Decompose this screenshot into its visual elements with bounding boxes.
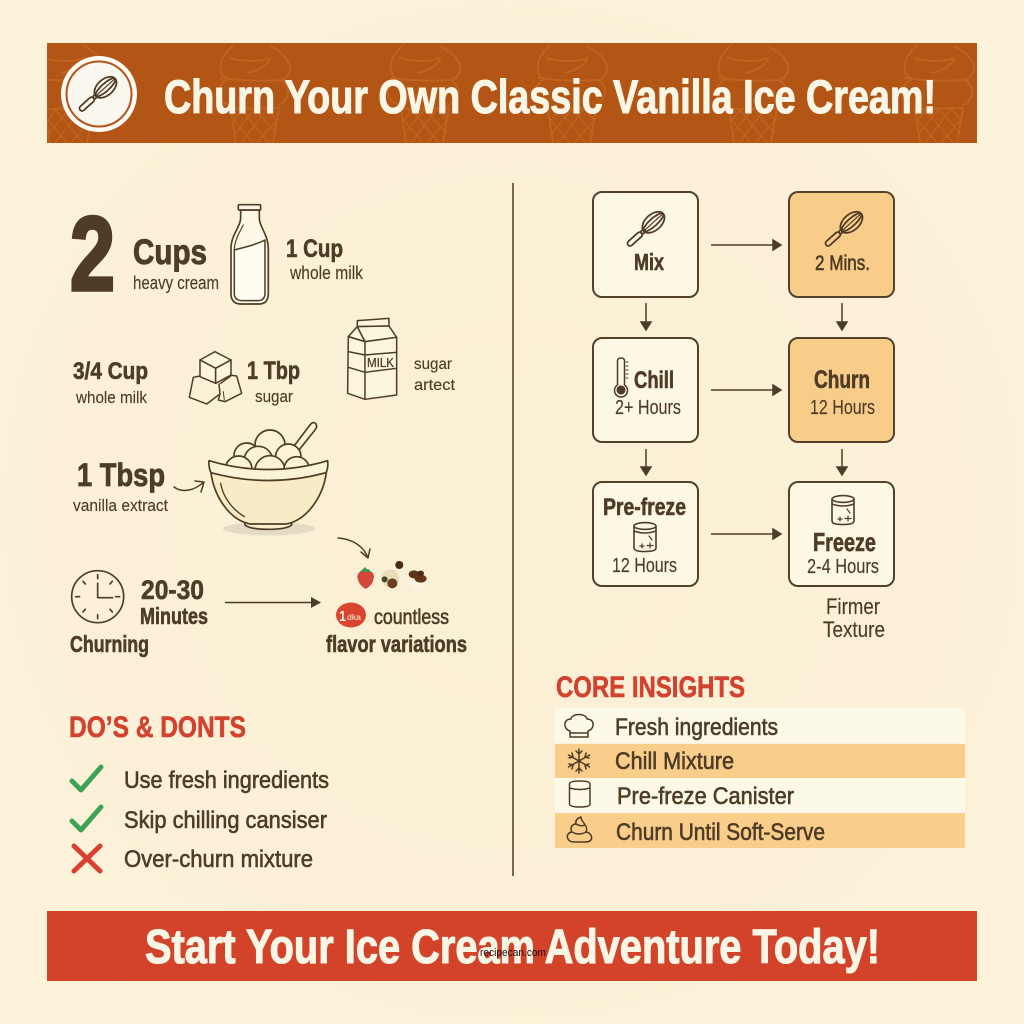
divider (512, 183, 514, 876)
nuts and chips (381, 561, 403, 588)
chocolate chunks (407, 570, 427, 589)
step: pre-freeze: 12 Hours (612, 555, 677, 577)
ice cream cone pattern (32, 45, 974, 143)
flavor variations text: flavor variations (326, 631, 467, 657)
step: freeze: Freeze (813, 527, 876, 557)
flavor variations text (326, 606, 467, 657)
carton caption (414, 356, 456, 394)
vanilla extract amount: vanilla extract (73, 496, 168, 515)
sugar amount: 1 Tbp (247, 357, 300, 385)
icon: whisk badge (61, 56, 137, 132)
icon: check (72, 807, 101, 830)
step: freeze (789, 482, 894, 586)
step: churn: Churn (814, 366, 870, 394)
whole milk 1 cup: 1 Cup (286, 235, 343, 263)
panel: ingredients (70, 196, 467, 657)
icon: clock (72, 571, 124, 623)
icon: flavor toppings (357, 561, 427, 589)
call to action: Start Your Ice Cream Adventure Today! (145, 921, 880, 974)
step: chill (593, 338, 698, 442)
item: Over-churn mixture (124, 846, 313, 873)
footer banner (47, 911, 977, 981)
strawberry (357, 567, 374, 589)
arrow (711, 240, 781, 250)
firmer texture note (823, 594, 885, 642)
step: churn: 12 Hours (810, 397, 875, 419)
step: pre-freeze (593, 482, 698, 586)
churning time: Minutes (140, 603, 208, 629)
item: Use fresh ingredients (124, 767, 329, 794)
sugar amount (247, 357, 300, 406)
carton caption: artect (414, 377, 456, 394)
arrow (641, 303, 651, 330)
arrow (641, 449, 651, 475)
whole milk 3/4 cup (73, 358, 148, 407)
arrow: vanilla to bowl (174, 481, 204, 492)
icon: sugar cubes (189, 352, 242, 404)
row: fresh ingredients (555, 708, 965, 743)
step: freeze: 2-4 Hours (807, 556, 879, 578)
firmer texture note: Texture (823, 617, 885, 642)
heading: CORE INSIGHTS (556, 671, 745, 704)
step: 2 mins: 2 Mins. (815, 252, 870, 275)
watermark: recipecan.com (480, 947, 546, 959)
whole milk 1 cup (286, 235, 364, 283)
row: chill mixture: Chill Mixture (615, 748, 734, 775)
whole milk 1 cup: whole milk (289, 263, 364, 283)
panel: do's and don'ts (69, 711, 329, 873)
icon: canister (570, 781, 590, 807)
row: churn until soft-serve: Churn Until Soft-Serve (616, 819, 825, 846)
churning time: Churning (70, 631, 149, 657)
step: mix (593, 192, 698, 297)
badge: count: dka (347, 613, 362, 622)
carton caption: sugar (414, 356, 453, 373)
heavy cream amount: 2 (70, 196, 115, 313)
step: chill: 2+ Hours (615, 397, 681, 419)
whole milk 3/4 cup: 3/4 Cup (73, 358, 148, 385)
icon: milk bottle (231, 205, 268, 304)
row: pre-freeze canister (555, 778, 965, 813)
icon: chef hat (565, 714, 593, 737)
whole milk 3/4 cup: whole milk (75, 388, 147, 407)
heavy cream amount (70, 196, 219, 313)
badge: count: 1 (339, 608, 346, 625)
step: pre-freeze: Pre-freze (603, 494, 686, 521)
icon: mixing bowl with scoops (209, 423, 328, 535)
icon: soft serve (567, 817, 592, 842)
header banner (32, 43, 977, 143)
step: chill: Chill (634, 367, 674, 394)
badge: count (336, 602, 366, 628)
churning time: 20-30 (141, 575, 204, 605)
arrow: bowl to toppings (338, 538, 370, 558)
heavy cream amount: heavy cream (133, 272, 219, 293)
arrow: churning to variations (225, 597, 321, 608)
step: 2 mins (789, 192, 894, 297)
step: churn (789, 338, 894, 442)
icon: milk carton: MILK (367, 355, 394, 370)
sugar amount: sugar (255, 387, 293, 406)
arrow (711, 529, 781, 539)
flavor variations text: countless (374, 606, 449, 629)
heading: DO’S & DONTS (69, 711, 246, 744)
panel: core insights (555, 671, 965, 848)
icon: cross (74, 846, 100, 871)
row: churn until soft-serve (555, 813, 965, 848)
icon: check (72, 767, 101, 790)
icon: thermometer (615, 358, 628, 397)
panel: process flow (593, 192, 894, 642)
vanilla extract amount (73, 457, 168, 515)
icon: milk carton (348, 318, 397, 399)
row: pre-freeze canister: Pre-freze Canister (617, 783, 794, 810)
arrow (837, 303, 847, 330)
icon: snowflake (568, 749, 590, 773)
heavy cream amount: Cups (133, 233, 207, 272)
churning time (70, 575, 208, 657)
arrow (837, 449, 847, 475)
row: fresh ingredients: Fresh ingredients (615, 714, 778, 741)
item: Skip chilling cansiser (124, 807, 327, 834)
vanilla extract amount: 1 Tbsp (77, 457, 165, 493)
arrow (711, 385, 781, 395)
firmer texture note: Firmer (826, 594, 880, 619)
step: mix: Mix (634, 249, 664, 275)
row: chill mixture (555, 744, 965, 778)
